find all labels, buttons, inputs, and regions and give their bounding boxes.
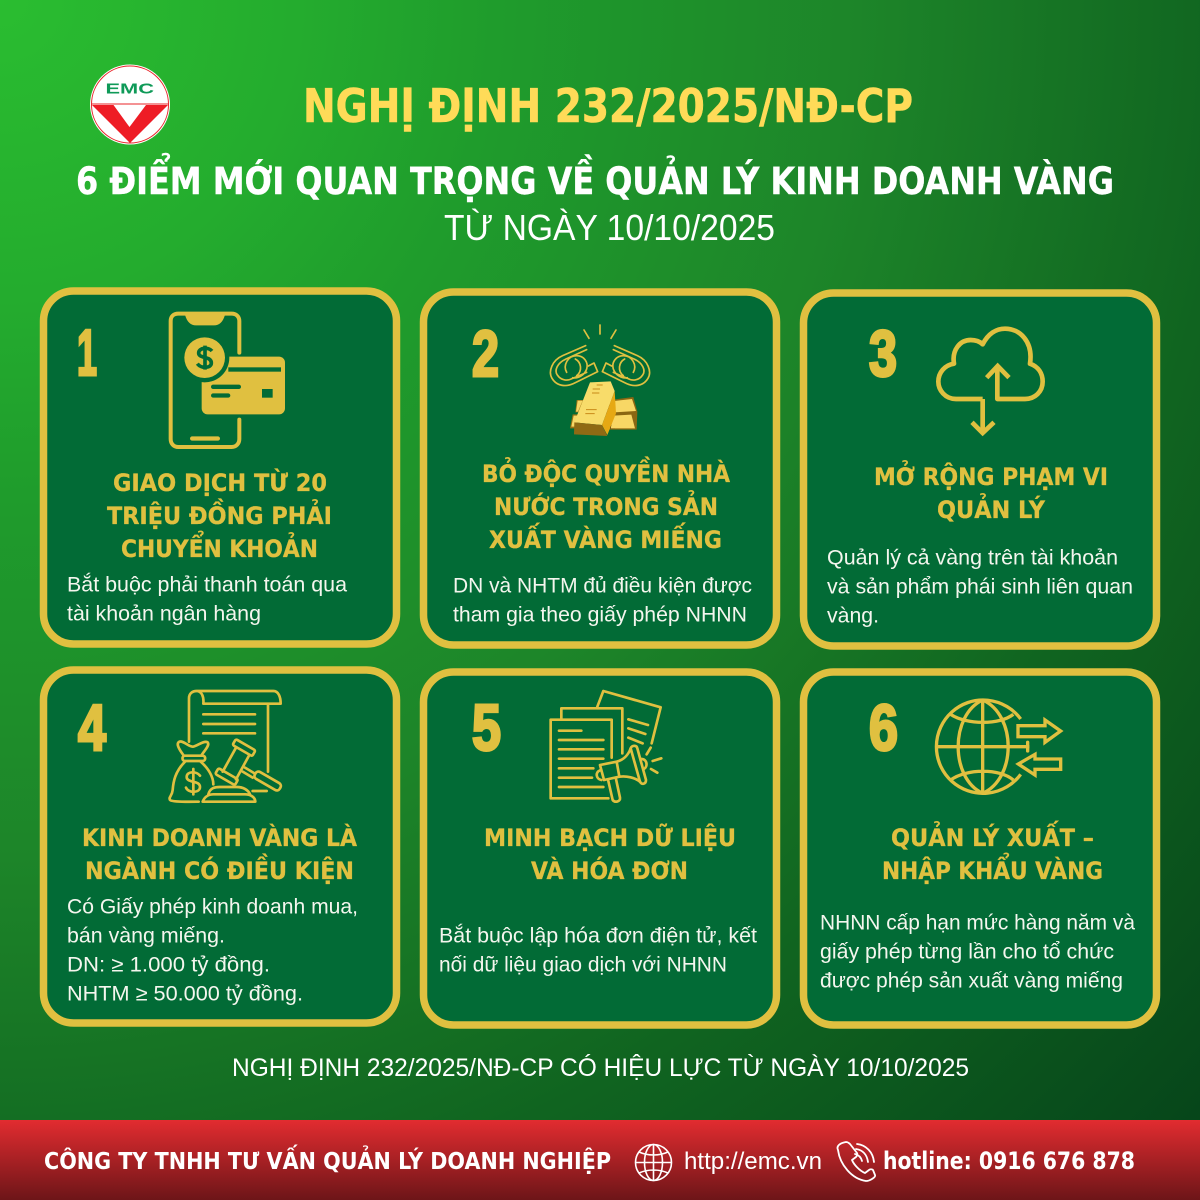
heading 2: NƯỚC TRONG SẢN: [494, 488, 718, 521]
body 2: tham gia theo giấy phép NHNN: [453, 603, 747, 626]
footer band: [0, 1120, 1200, 1200]
heading 2: XUẤT VÀNG MIẾNG: [489, 521, 722, 554]
body 4: bán vàng miếng.: [67, 924, 225, 947]
body 6: [820, 911, 1135, 992]
heading 2: BỎ ĐỘC QUYỀN NHÀ: [482, 455, 730, 488]
body 2: [453, 574, 752, 626]
icon: broken chain and gold bars: [550, 325, 650, 436]
body 5: Bắt buộc lập hóa đơn điện tử, kết: [439, 924, 757, 947]
heading 3: [874, 458, 1108, 524]
panel: 3: [804, 293, 1156, 646]
heading 1: CHUYỂN KHOẢN: [121, 529, 318, 563]
panel: 2: [424, 292, 776, 645]
icon: phone and card: [171, 314, 285, 447]
body 3: Quản lý cả vàng trên tài khoản: [827, 546, 1118, 569]
company name: CÔNG TY TNHH TƯ VẤN QUẢN LÝ DOANH NGHIỆP: [44, 1144, 611, 1175]
title: NGHỊ ĐỊNH 232/2025/NĐ-CP: [303, 79, 913, 133]
website: http://emc.vn: [684, 1148, 822, 1175]
body 5: [439, 924, 757, 976]
effective date note: NGHỊ ĐỊNH 232/2025/NĐ-CP CÓ HIỆU LỰC TỪ NGÀY 10/10/2025: [232, 1053, 969, 1082]
icon: web globe: [636, 1144, 672, 1180]
body 4: DN: ≥ 1.000 tỷ đồng.: [67, 953, 270, 976]
heading 4: [82, 823, 357, 885]
number 3: 3: [869, 317, 897, 390]
heading 6: NHẬP KHẨU VÀNG: [882, 851, 1103, 885]
body 6: được phép sản xuất vàng miếng: [820, 969, 1123, 992]
heading 6: QUẢN LÝ XUẤT –: [891, 819, 1094, 852]
heading 1: GIAO DỊCH TỪ 20: [113, 467, 327, 497]
icon: documents and megaphone: [551, 691, 661, 802]
icon: contract, money bag and gavel: [170, 691, 282, 802]
body 1: Bắt buộc phải thanh toán qua: [67, 573, 347, 596]
icon: cloud up and down: [938, 329, 1043, 433]
heading 5: VÀ HÓA ĐƠN: [531, 855, 688, 885]
body 4: [67, 895, 358, 1005]
panel: 6: [804, 672, 1156, 1025]
heading 6: [882, 819, 1103, 885]
number 5: 5: [472, 691, 501, 764]
logo: EMC: EMC: [106, 80, 154, 97]
body 3: [827, 546, 1133, 627]
heading 3: MỞ RỘNG PHẠM VI: [874, 458, 1108, 491]
heading 1: [107, 467, 332, 563]
body 3: và sản phẩm phái sinh liên quan: [827, 575, 1133, 598]
body 4: NHTM ≥ 50.000 tỷ đồng.: [67, 982, 303, 1005]
body 1: tài khoản ngân hàng: [67, 602, 261, 625]
number 1: 1: [77, 316, 97, 389]
date line: TỪ NGÀY 10/10/2025: [444, 207, 775, 248]
heading 5: [484, 822, 736, 885]
body 6: NHNN cấp hạn mức hàng năm và: [820, 911, 1135, 934]
hotline: hotline: 0916 676 878: [883, 1147, 1135, 1175]
heading 4: KINH DOANH VÀNG LÀ: [82, 823, 357, 852]
number 2: 2: [472, 317, 499, 390]
panel: 4: [44, 670, 396, 1023]
heading 2: [482, 455, 730, 554]
panel: 1: [44, 291, 396, 644]
number 6: 6: [869, 691, 898, 764]
body 5: nối dữ liệu giao dịch với NHNN: [439, 953, 727, 976]
body 1: [67, 573, 347, 625]
body 2: DN và NHTM đủ điều kiện được: [453, 574, 752, 597]
heading 3: QUẢN LÝ: [937, 491, 1046, 524]
heading 1: TRIỆU ĐỒNG PHẢI: [107, 497, 332, 530]
heading 4: NGÀNH CÓ ĐIỀU KIỆN: [85, 852, 354, 885]
body 3: vàng.: [827, 604, 879, 627]
logo: EMC: [90, 64, 170, 144]
number 4: 4: [78, 691, 106, 764]
icon: globe with import export arrows: [936, 700, 1061, 793]
panel: 5: [424, 672, 776, 1025]
body 6: giấy phép từng lần cho tổ chức: [820, 940, 1114, 963]
icon: phone: [837, 1142, 875, 1181]
heading 5: MINH BẠCH DỮ LIỆU: [484, 822, 736, 852]
body 4: Có Giấy phép kinh doanh mua,: [67, 895, 358, 918]
